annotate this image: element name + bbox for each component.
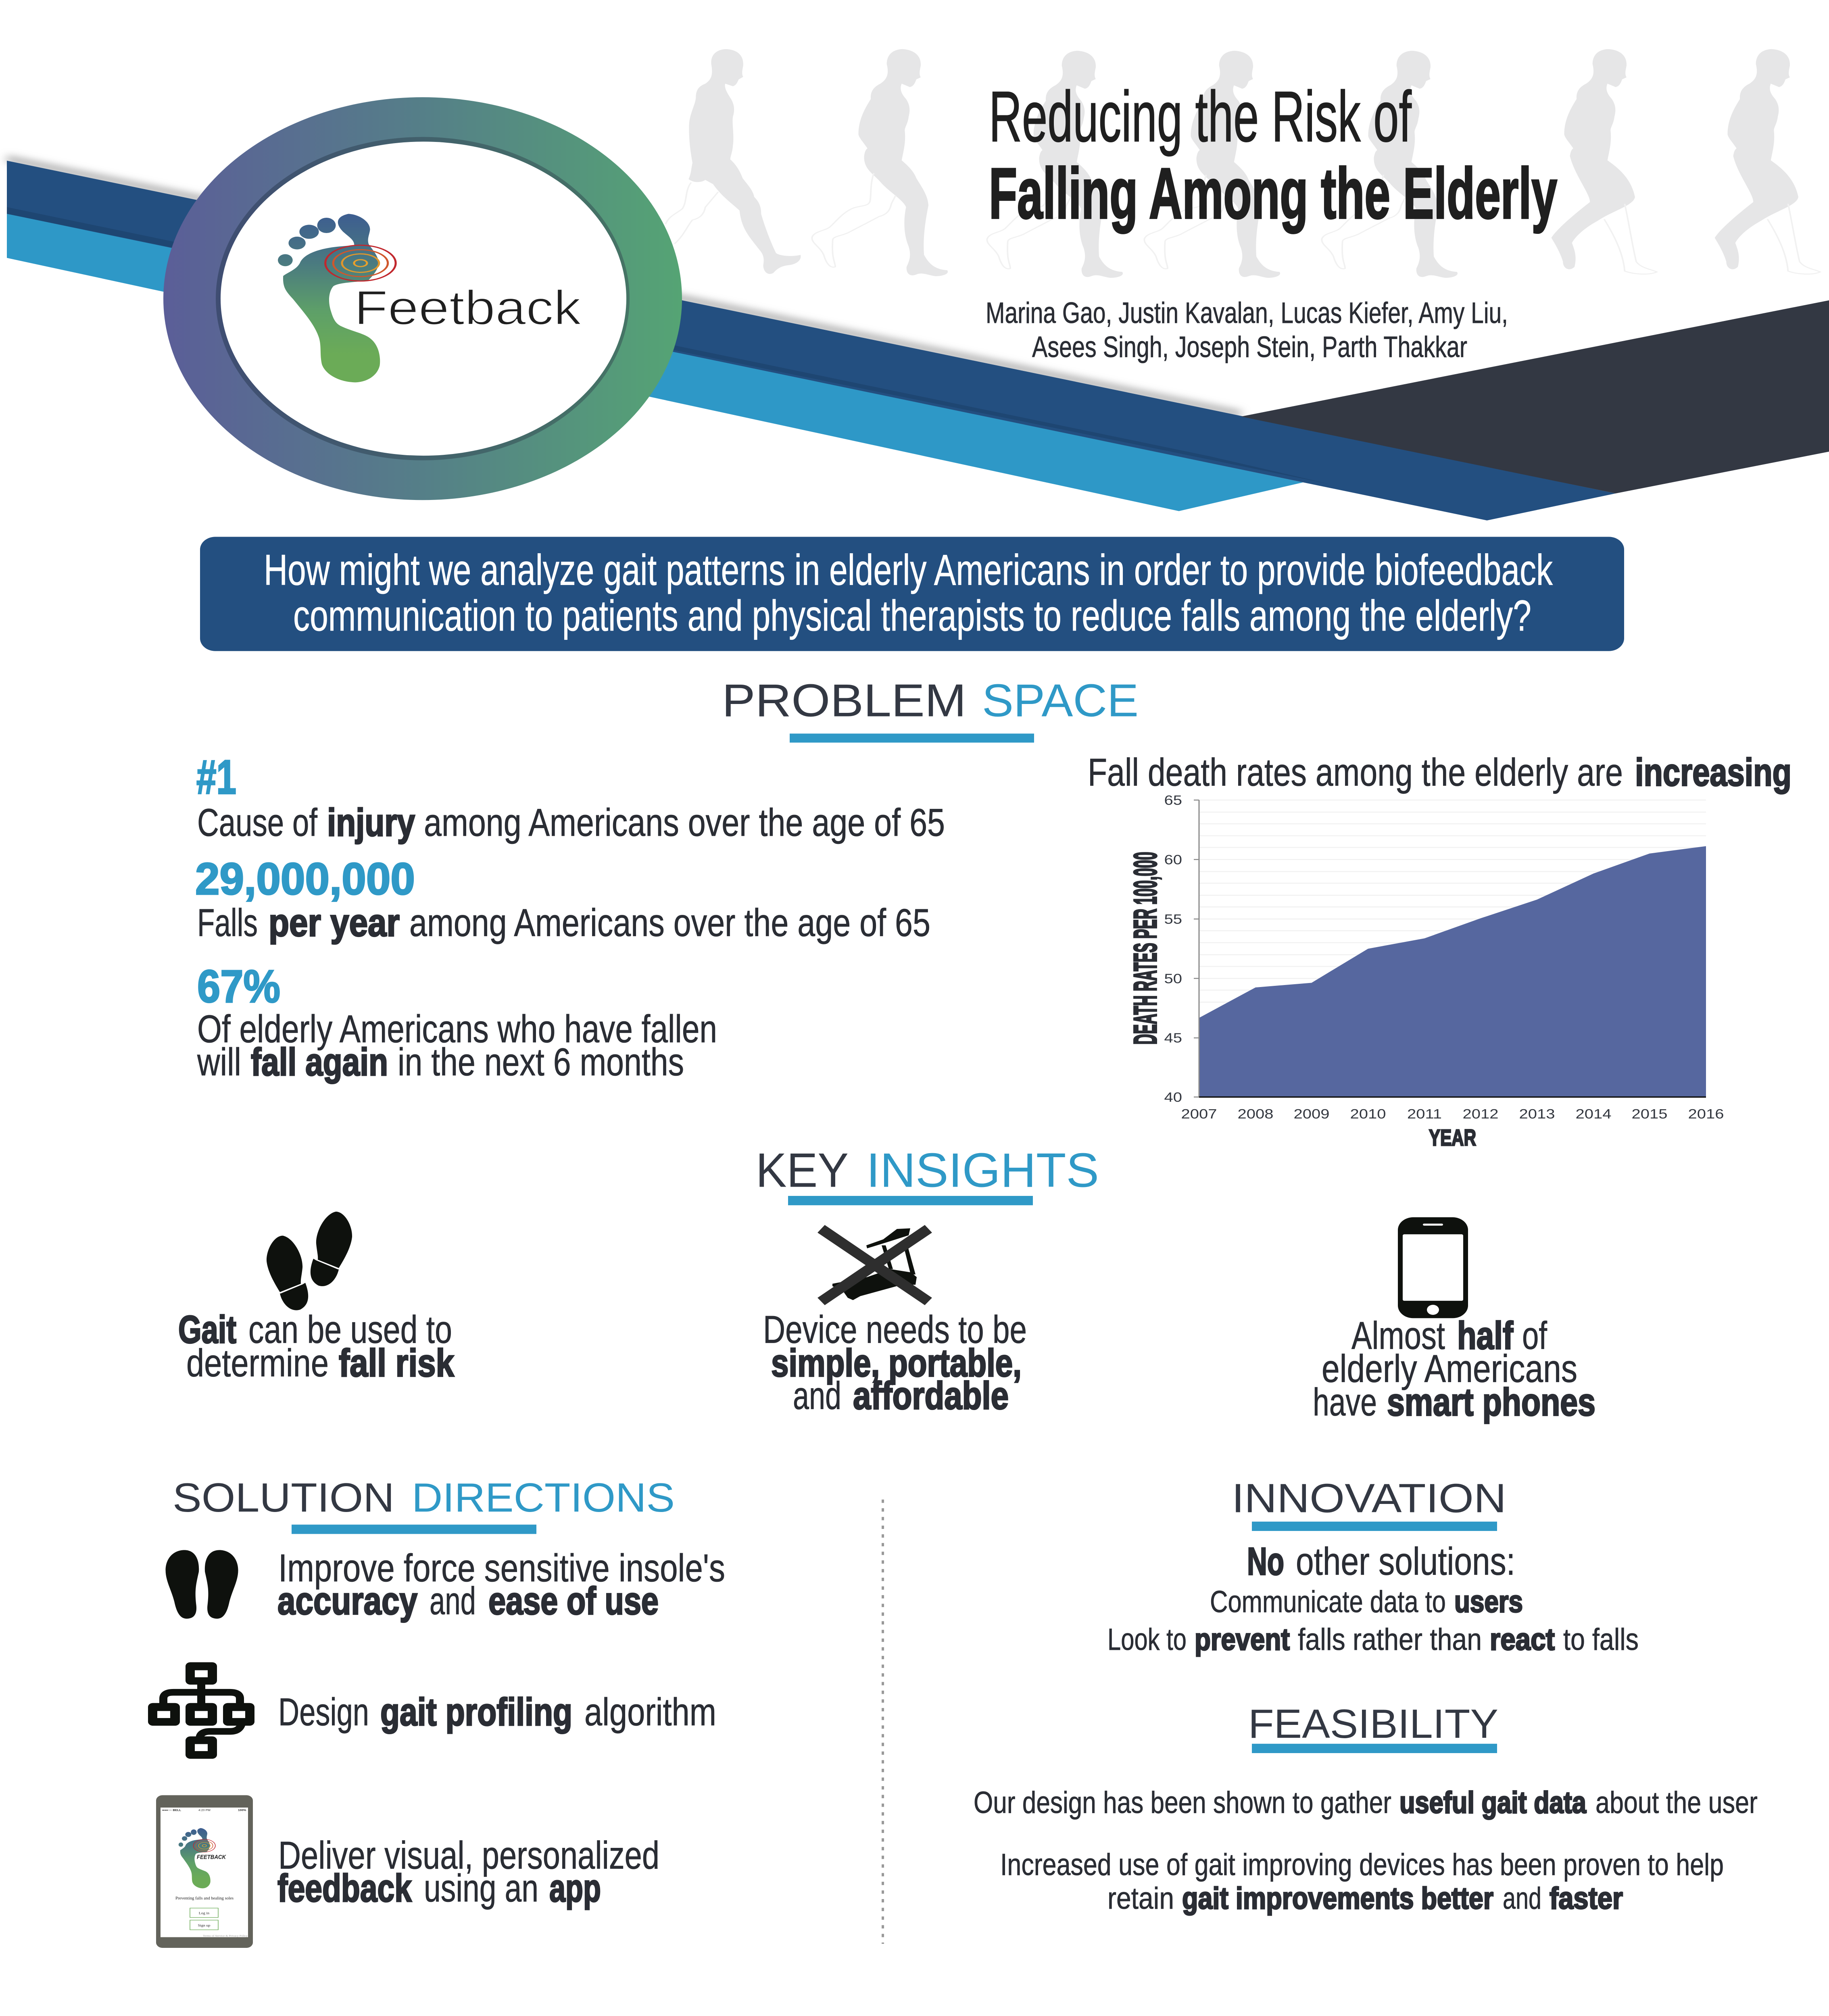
insight: device: and [793,1374,841,1417]
stat: number one: injury [327,801,415,844]
direction: app: Deliver visual, personalized [278,1834,659,1877]
feasibility text: retain [1107,1881,1174,1915]
authors: Marina Gao, Justin Kavalan, Lucas Kiefer, Amy Liu, [986,297,1508,329]
heading: solution directions: DIRECTIONS [412,1475,675,1520]
heading: key insights: INSIGHTS [866,1143,1099,1198]
heading: problem space: SPACE [982,675,1139,726]
shadow [7,159,1241,414]
dark blue band [7,161,1616,521]
insight: device: affordable [853,1374,1009,1417]
stat: 29 million [195,854,930,944]
status bar [162,1808,246,1812]
header ribbon [7,159,1829,521]
figure 5 [1322,51,1458,278]
x tick labels: 2008 [1238,1106,1273,1121]
logo ring [163,97,682,500]
direction: app: feedback [277,1866,412,1910]
direction: insole: and [430,1579,476,1622]
innovation text: Look to [1107,1622,1187,1656]
area chart [1127,793,1724,1151]
innovation text: to falls [1563,1622,1639,1656]
terms: Terms of Service & Privacy Policy [203,1934,248,1937]
authors [986,297,1508,364]
feasibility text: gait improvements better [1182,1881,1493,1915]
icon: shoe prints [267,1212,352,1310]
sign up button [190,1920,218,1930]
x tick labels: 2007 [1181,1106,1217,1121]
x tick labels: 2011 [1407,1106,1442,1121]
icon: algorithm flowchart [148,1662,254,1759]
status bar: 4:20 PM [198,1808,211,1812]
stat: 29 million: 29,000,000 [195,854,415,904]
heading: solution directions [173,1475,675,1534]
insight: smartphones: half [1457,1314,1513,1357]
innovation text [1107,1540,1639,1656]
feasibility text: faster [1550,1881,1623,1915]
y tick labels: 60 [1164,852,1182,867]
charcoal band [1241,300,1829,494]
x tick labels: 2015 [1632,1106,1667,1121]
x tick labels: 2010 [1350,1106,1386,1121]
direction: algorithm: algorithm [584,1691,716,1734]
stat: 29 million: among Americans over the age of 65 [409,901,930,944]
feasibility text: and [1503,1881,1541,1915]
direction: algorithm: gait profiling [380,1691,572,1734]
innovation text: react [1490,1622,1555,1656]
title: Reducing the Risk of [989,76,1412,156]
stat: 29 million: Falls [197,901,258,944]
log in button [190,1908,218,1918]
heading: problem space: PROBLEM [722,675,966,726]
insight: gait: determine [186,1341,329,1385]
insight: device: Device needs to be [763,1308,1027,1351]
x tick labels: 2016 [1688,1106,1724,1121]
heading: key insights [756,1143,1099,1205]
y axis title: DEATH RATES PER 100,000 [1127,852,1163,1045]
stat: number one: #1 [196,750,236,804]
y tick labels: 55 [1164,912,1182,927]
stat: 67 percent: will [197,1040,241,1084]
log in button: Log in [199,1911,210,1915]
insight: device [763,1308,1027,1417]
stat: number one: Cause of [197,801,317,844]
figure 6 [1552,49,1657,274]
band crease [7,207,1331,484]
icon: crossed-out treadmill [818,1225,932,1305]
insight: smartphones: smart phones [1387,1381,1595,1424]
heading: innovation: INNOVATION [1232,1475,1506,1521]
innovation text: users [1454,1585,1523,1619]
heading: problem space [722,675,1139,743]
stat: 67 percent [197,960,717,1084]
sign up button: Sign up [198,1924,211,1927]
insight: gait: Gait [178,1308,236,1351]
heading: solution directions: SOLUTION [173,1475,394,1520]
direction: algorithm [278,1691,716,1734]
logo foot icon [278,214,396,382]
x tick labels [1181,1106,1724,1121]
authors: Asees Singh, Joseph Stein, Parth Thakkar [1032,331,1467,364]
x tick labels: 2012 [1463,1106,1498,1121]
area series [1199,846,1706,1097]
innovation text: No [1247,1540,1284,1583]
x axis title: YEAR [1429,1125,1476,1151]
figure 4 [1144,51,1280,278]
insight: gait [178,1308,455,1385]
status bar: 100% [238,1808,246,1812]
y tick labels [1164,793,1182,1105]
icon: insoles [166,1550,238,1619]
figure 2 [812,49,948,276]
stat: 29 million: per year [269,901,400,944]
heading: key insights: KEY [756,1143,849,1198]
feasibility text [974,1785,1758,1915]
stat: 67 percent: in the next 6 months [398,1040,684,1084]
insight: smartphones [1313,1314,1595,1424]
insight: smartphones: of [1522,1314,1547,1357]
x tick labels: 2009 [1294,1106,1329,1121]
innovation text: other solutions: [1296,1540,1515,1583]
insight: smartphones: have [1313,1381,1377,1424]
innovation text: Communicate data to [1210,1585,1446,1619]
light blue band [7,212,1303,511]
mini foot [179,1828,215,1888]
icon: app phone mockup [156,1795,253,1948]
stat: 67 percent: Of elderly Americans who have fallen [197,1007,717,1051]
y tick labels: 50 [1164,971,1182,986]
direction: insole [277,1547,725,1622]
heading: feasibility: FEASIBILITY [1248,1701,1498,1747]
figure 3 [987,51,1123,278]
question banner [200,537,1624,651]
figure 7 [1715,49,1820,274]
feasibility text: about the user [1595,1785,1758,1820]
figure 1 [665,49,801,274]
status bar: ●●●○○ BELL [162,1808,181,1812]
icon: smartphone [1398,1217,1468,1318]
feasibility text: useful gait data [1399,1785,1587,1820]
y tick labels: 45 [1164,1031,1182,1045]
direction: insole: accuracy [277,1579,417,1622]
x tick labels: 2014 [1576,1106,1611,1121]
insight: device: simple, portable, [771,1341,1022,1385]
direction: app [277,1834,659,1910]
logo wordmark: Feetback [354,281,581,335]
stat: 67 percent: 67% [197,960,280,1012]
y tick labels: 65 [1164,793,1182,808]
insight: gait: can be used to [248,1308,452,1351]
insight: smartphones: elderly Americans [1322,1347,1577,1390]
direction: insole: Improve force sensitive insole's [278,1547,725,1590]
tagline: Preventing falls and healing soles [175,1895,234,1901]
innovation text: falls rather than [1298,1622,1482,1656]
stat: number one [196,750,945,844]
stat: 67 percent: fall again [251,1040,388,1084]
mini wordmark: FEETBACK [197,1854,226,1860]
insight: gait: fall risk [339,1341,455,1385]
x tick labels: 2013 [1519,1106,1555,1121]
stat: number one: among Americans over the age of 65 [424,801,945,844]
direction: insole: ease of use [488,1579,659,1622]
feasibility text: Our design has been shown to gather [974,1785,1391,1820]
direction: algorithm: Design [278,1691,369,1734]
direction: app: app [549,1866,601,1910]
direction: app: using an [424,1866,538,1910]
innovation text: prevent [1195,1622,1290,1656]
insight: smartphones: Almost [1351,1314,1445,1357]
title [989,76,1557,233]
walking figures [665,49,1820,278]
y tick labels: 40 [1164,1090,1182,1105]
